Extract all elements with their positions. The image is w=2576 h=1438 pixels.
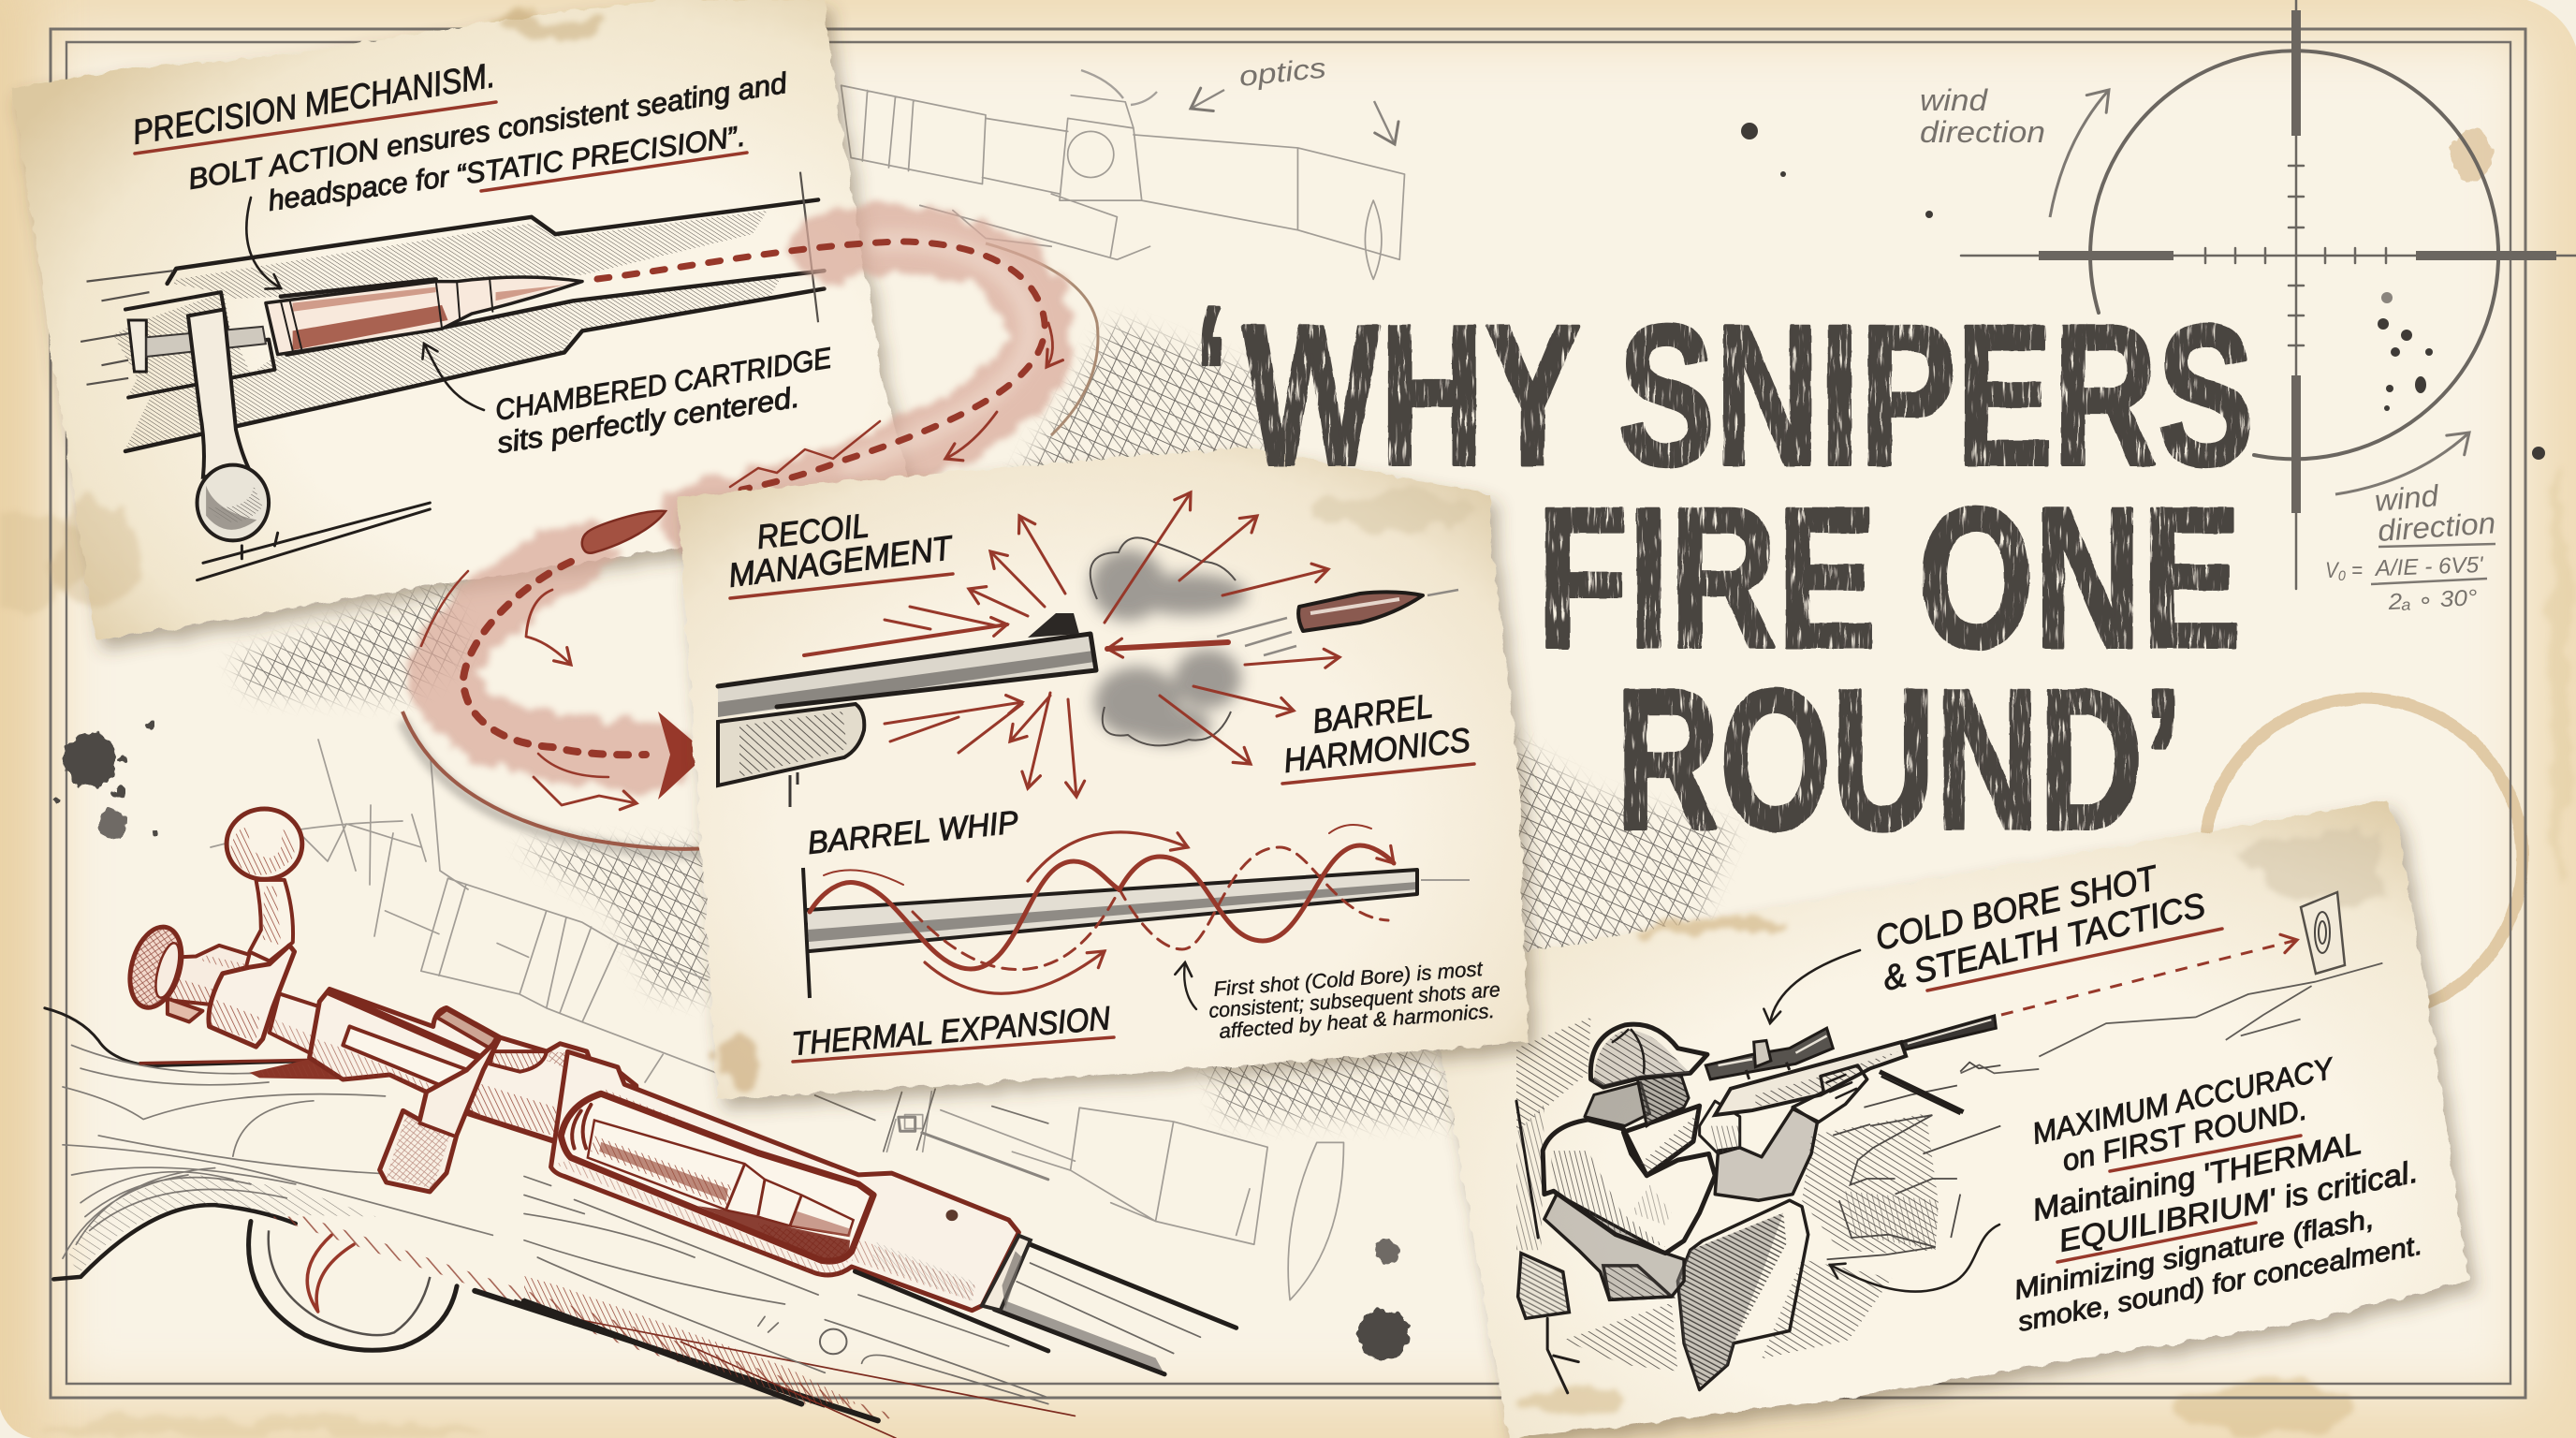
title: FIRE ONE	[1537, 466, 2241, 690]
note: first shot line 3: affected by heat & harmonics.	[1219, 999, 1496, 1043]
wind direction note top: direction	[1920, 115, 2045, 149]
heading: management: MANAGEMENT	[726, 528, 957, 594]
body hatching	[466, 1082, 557, 1136]
knob	[227, 809, 302, 879]
forearm	[1715, 1108, 1818, 1200]
bullet path to target	[2001, 940, 2297, 1015]
leg	[1677, 1200, 1808, 1389]
panel: cold bore shot and stealth tactics	[1404, 801, 2468, 1438]
bolt and handle	[113, 292, 430, 580]
action cross-section diagram	[80, 172, 824, 580]
blank paper loop under the trajectory	[402, 243, 1098, 853]
terrain sketch	[1961, 963, 2382, 1073]
static precision underline	[481, 153, 747, 191]
heading: thermal expansion: THERMAL EXPANSION	[790, 1000, 1112, 1063]
wind direction note top: wind	[1920, 83, 1988, 117]
flow arrows around band	[421, 323, 1053, 805]
ejection port with cartridge	[524, 1051, 1048, 1404]
harmonics underline	[1282, 764, 1474, 784]
bolt, handle and receiver rear	[122, 809, 637, 1192]
handle stem	[249, 880, 293, 961]
front lug	[490, 1051, 547, 1072]
text: first round: on FIRST ROUND.	[2059, 1092, 2309, 1178]
body: static precision: headspace for “STATIC PRECISION”.	[266, 120, 747, 217]
target	[2301, 892, 2345, 974]
sniper figure	[1516, 1016, 2000, 1393]
note: first shot line 2: consistent; subsequent shots are	[1208, 977, 1501, 1022]
heading: precision mechanism: PRECISION MECHANISM.	[130, 56, 497, 152]
thermal expansion underline	[793, 1037, 1114, 1062]
dashed trajectory upper	[597, 242, 1045, 490]
rifle	[1715, 1042, 1906, 1115]
stock top line	[139, 1060, 310, 1064]
shroud	[209, 946, 295, 1047]
arrowhead	[658, 712, 708, 800]
cap	[1590, 1024, 1707, 1087]
text: maximum accuracy: MAXIMUM ACCURACY	[2029, 1050, 2338, 1151]
trigger guard	[249, 1221, 457, 1350]
stock butt	[1623, 1106, 1700, 1176]
optics label with arrows: optics	[1237, 52, 1327, 93]
text: equilibrium: EQUILIBRIUM' is critical.	[2056, 1153, 2421, 1258]
arrow to sniper	[1830, 1225, 1999, 1292]
arrow from heading to sniper	[1770, 950, 1860, 1023]
heading underline	[135, 102, 496, 154]
arrow to cartridge	[424, 344, 484, 410]
arrow to chamber	[246, 198, 281, 288]
coffee ring stain	[2204, 698, 2523, 1017]
text: maintaining thermal: Maintaining 'THERMAL	[2029, 1125, 2364, 1227]
flying bullet	[582, 511, 666, 553]
heading: barrel: BARREL	[1310, 686, 1435, 741]
management underline	[730, 574, 953, 598]
wind direction note and formula: direction	[2377, 506, 2496, 548]
dashed trajectory lower	[463, 562, 646, 755]
label: chambered cartridge: CHAMBERED CARTRIDGE	[493, 342, 834, 427]
reticle crosshair	[1961, 0, 2576, 589]
panel: precision mechanism	[12, 0, 917, 640]
shaft	[270, 993, 323, 1054]
text: concealment: smoke, sound) for concealment.	[2015, 1230, 2424, 1338]
stock grain and lines	[524, 1089, 1048, 1404]
wind direction note and formula: 2ₐ ∘ 30°	[2387, 585, 2479, 615]
barrel	[994, 1244, 1237, 1374]
optics sketch: background scope	[842, 85, 1405, 279]
bolt cylinder and cocking piece	[163, 946, 249, 1005]
scope	[1705, 1028, 1833, 1079]
note: first shot line 1: First shot (Cold Bore) is most	[1212, 957, 1484, 1001]
paper sheet	[12, 0, 917, 640]
pink smear band	[445, 240, 1039, 756]
stain on sheet	[1521, 822, 2389, 1418]
heading: recoil: RECOIL	[754, 506, 871, 556]
stains on sheet	[721, 495, 1479, 1091]
large rifle bolt illustration	[45, 809, 1237, 1438]
heading: harmonics: HARMONICS	[1281, 720, 1472, 780]
wind direction note top	[1920, 83, 2109, 217]
muzzle ring	[982, 1236, 1031, 1311]
receiver top and window	[310, 989, 637, 1180]
wind direction note and formula: wind	[2373, 478, 2441, 518]
stains on sheet	[51, 19, 604, 604]
torso and sleeve	[1543, 1120, 1715, 1254]
fore body hatch and pin	[852, 1239, 975, 1301]
heading underline	[1927, 929, 2222, 990]
background hatching	[1516, 1018, 1939, 1372]
right hand	[1793, 1065, 1867, 1123]
small stain on reticle	[2451, 128, 2492, 181]
hatched top band	[601, 1089, 858, 1189]
first round underline	[2110, 1136, 2301, 1171]
left hand	[1700, 1101, 1740, 1153]
wind direction note and formula: A/IE - 6V5'	[2373, 552, 2485, 581]
panel: recoil and barrel harmonics	[678, 448, 1529, 1100]
receiver front body	[551, 1051, 1018, 1311]
background sketch scopes	[386, 878, 1344, 1300]
faint sketch lines lower left	[211, 740, 468, 936]
barrel and muzzle	[718, 613, 1096, 807]
title: ‘	[1194, 265, 1228, 489]
text: minimizing signature: Minimizing signature (flash,	[2012, 1204, 2377, 1306]
fired bullet	[1217, 590, 1458, 655]
heading: stealth tactics: & STEALTH TACTICS	[1880, 886, 2209, 998]
red bullet trajectory	[421, 240, 1053, 805]
chambered cartridge	[266, 277, 582, 355]
sight plate	[380, 1037, 500, 1192]
paper sheet	[678, 448, 1529, 1100]
ink splatters	[52, 722, 1412, 1360]
optics label with arrows	[1081, 52, 1395, 144]
rifle stock	[45, 1008, 1075, 1438]
title	[1194, 265, 2254, 872]
muzzle smoke cloud	[1090, 537, 1247, 745]
barrel whip diagram	[803, 825, 1470, 998]
pack and belt	[1544, 1195, 1684, 1299]
paper sheet	[1404, 801, 2468, 1438]
label: sits centered: sits perfectly centered.	[495, 380, 801, 460]
title: ROUND’	[1616, 648, 2183, 872]
inner pale smear	[842, 241, 1030, 468]
ink dots around reticle	[1741, 123, 2545, 460]
head: balaclava and face	[1585, 1082, 1650, 1126]
heading: barrel whip: BARREL WHIP	[806, 804, 1020, 861]
wind direction note and formula	[2325, 433, 2496, 615]
port opening	[561, 1093, 873, 1261]
arrow to note	[1184, 962, 1196, 1009]
cartridge	[588, 1121, 854, 1236]
equilibrium underline	[2057, 1223, 2256, 1262]
heading: cold bore shot: COLD BORE SHOT	[1872, 858, 2162, 958]
target rings	[2315, 912, 2330, 953]
radiating recoil arrows	[804, 492, 1339, 797]
body: bolt action: BOLT ACTION ensures consistent seating and	[186, 66, 791, 196]
wind direction note and formula: V₀ =	[2325, 558, 2363, 583]
